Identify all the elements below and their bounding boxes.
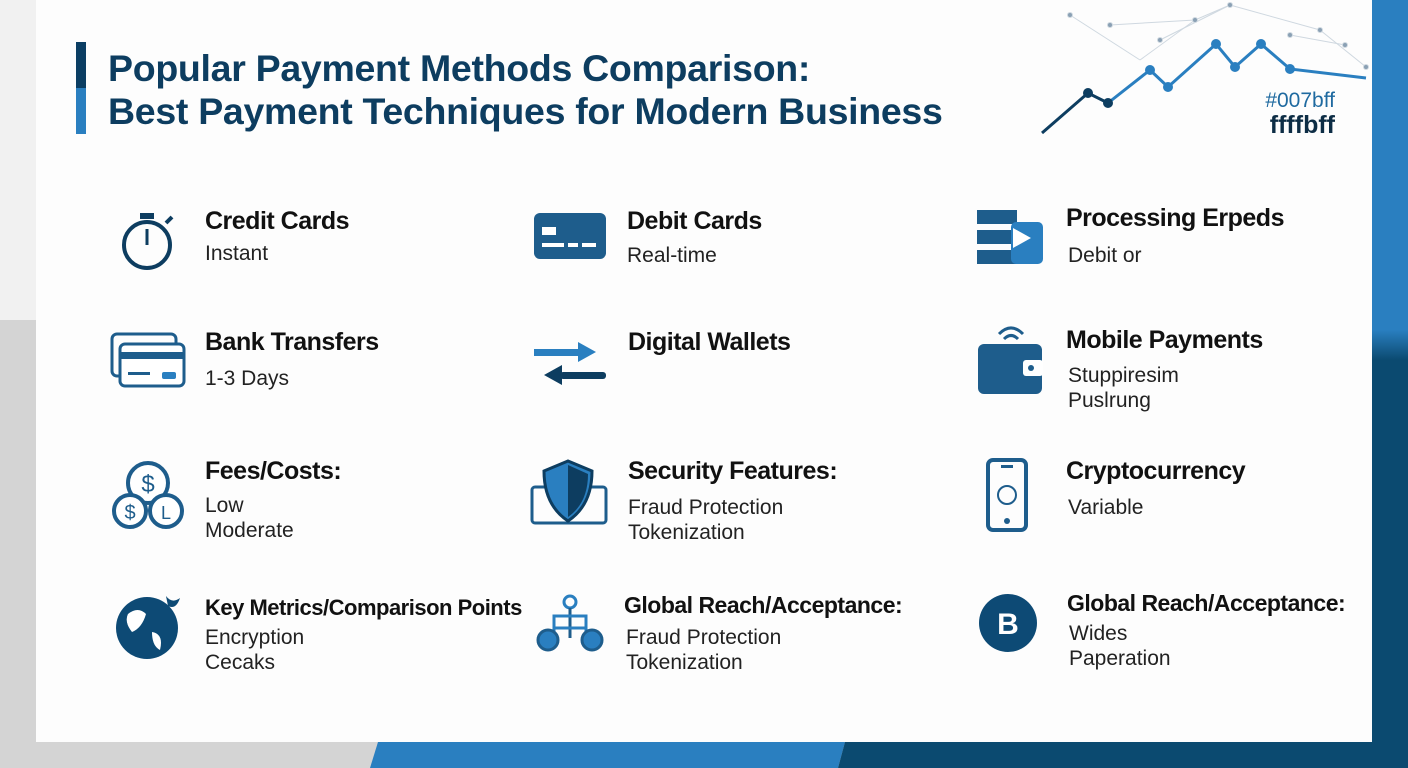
icon: coins [112, 461, 184, 529]
title: Best Payment Techniques for Modern Business [108, 90, 943, 132]
color code labels [1265, 89, 1335, 139]
item: global reach 2: Wides [1069, 622, 1127, 645]
item: global reach 1: Tokenization [626, 651, 743, 674]
item: key metrics: Cecaks [205, 651, 275, 674]
item: processing: Debit or [1068, 244, 1142, 267]
icon: processing [977, 210, 1043, 264]
icon: bitcoin: B [997, 608, 1019, 641]
item: mobile payments: Stuppiresim [1068, 364, 1179, 387]
item: security: Tokenization [628, 521, 745, 544]
item: credit cards: Credit Cards [205, 207, 349, 235]
icon: arrows [534, 342, 606, 385]
item: global reach 1 [536, 592, 902, 674]
icon: coins: $ [141, 471, 155, 498]
item: global reach 1: Global Reach/Acceptance: [624, 592, 902, 618]
item: debit cards: Debit Cards [627, 207, 762, 235]
item: security: Security Features: [628, 457, 837, 485]
item: bank transfers: 1-3 Days [205, 367, 289, 390]
item: key metrics: Key Metrics/Comparison Points [205, 595, 522, 620]
item: key metrics: Encryption [205, 626, 304, 649]
item: cryptocurrency [986, 457, 1246, 532]
title [76, 42, 943, 134]
color code labels: ffffbff [1270, 111, 1335, 139]
color code labels: #007bff [1265, 89, 1335, 112]
item: mobile payments: Puslrung [1068, 389, 1151, 412]
icon: globe [116, 596, 180, 659]
item: global reach 2: Global Reach/Acceptance: [1067, 590, 1345, 616]
item: credit cards: Instant [205, 242, 268, 265]
item: processing [977, 204, 1284, 267]
item: digital wallets: Digital Wallets [628, 328, 790, 356]
chart decoration [1041, 2, 1369, 134]
item: processing: Processing Erpeds [1066, 204, 1284, 232]
item: digital wallets [534, 328, 790, 385]
icon: cards [110, 332, 186, 388]
item: mobile payments: Mobile Payments [1066, 326, 1263, 354]
item: credit cards [122, 207, 349, 270]
item: fees: Moderate [205, 519, 294, 542]
item: cryptocurrency: Cryptocurrency [1066, 457, 1245, 485]
item: fees: Low [205, 494, 244, 517]
icon: wallet [978, 326, 1042, 394]
icon: coins: L [161, 503, 171, 523]
icon: phone [986, 458, 1028, 532]
icon: network [536, 594, 604, 652]
item: key metrics [116, 595, 522, 674]
item: debit cards: Real-time [627, 244, 717, 267]
item: cryptocurrency: Variable [1068, 496, 1144, 519]
item: fees [112, 457, 341, 542]
item: bank transfers: Bank Transfers [205, 328, 379, 356]
icon: shield [530, 459, 608, 524]
title: Popular Payment Methods Comparison: [108, 47, 810, 89]
icon: coins: $ [124, 502, 136, 524]
item: fees: Fees/Costs: [205, 457, 341, 485]
item: security: Fraud Protection [628, 496, 783, 519]
item: bank transfers [110, 328, 379, 390]
icon: bitcoin [979, 594, 1037, 652]
item: global reach 2 [979, 590, 1345, 670]
icon: stopwatch [122, 213, 174, 270]
item: debit cards [534, 207, 762, 267]
item: security [530, 457, 837, 544]
icon: card [534, 213, 606, 259]
item: global reach 1: Fraud Protection [626, 626, 781, 649]
item: global reach 2: Paperation [1069, 647, 1171, 670]
item: mobile payments [978, 326, 1263, 412]
